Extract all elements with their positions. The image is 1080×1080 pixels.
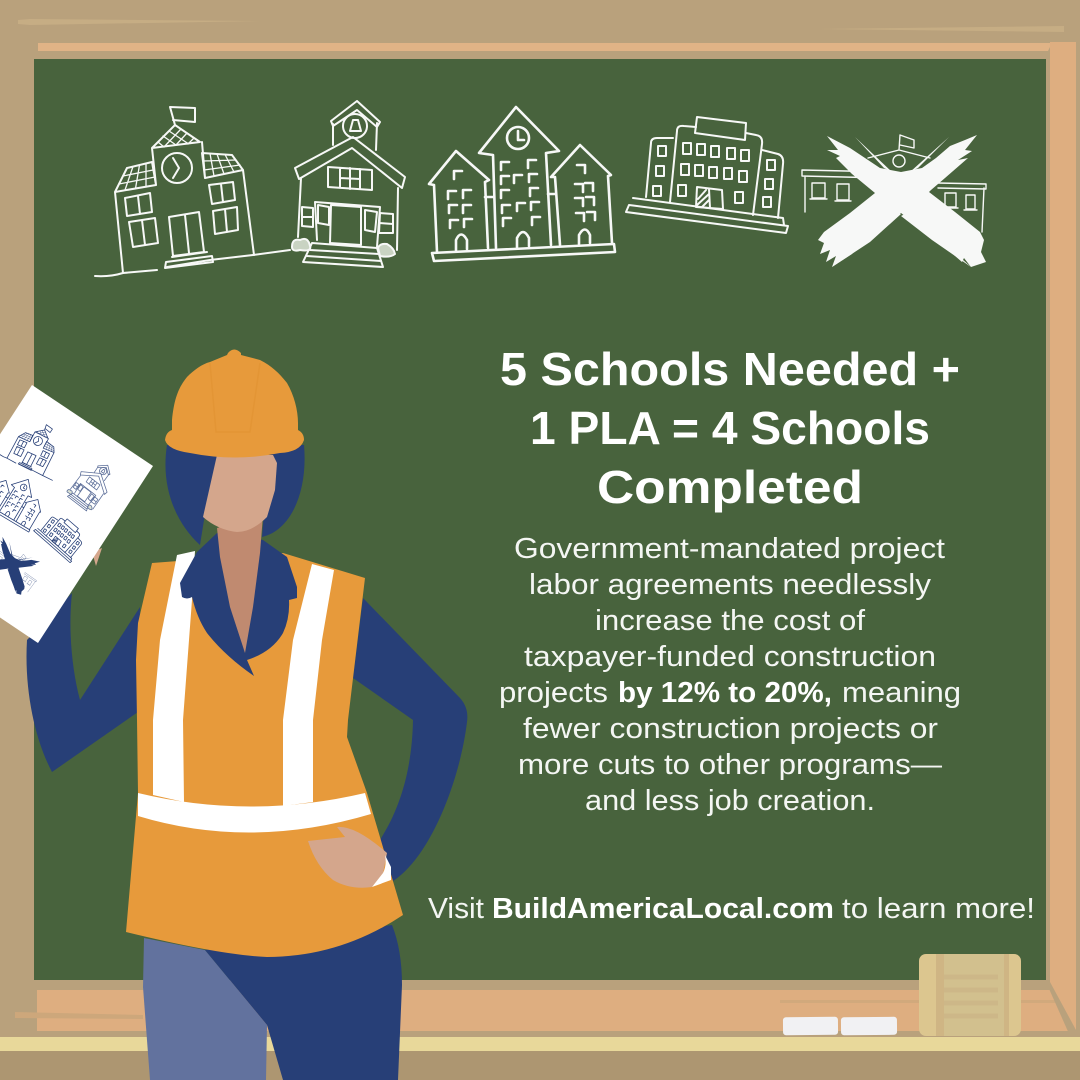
body text: projects: [499, 677, 608, 709]
icon: crossed-out school: [802, 135, 986, 267]
body text: labor agreements needlessly: [529, 569, 932, 601]
icon: modern school building: [626, 117, 788, 233]
call to action: Visit: [428, 893, 484, 925]
paper icon: school two: [64, 454, 120, 515]
hard hat: [165, 350, 304, 458]
paper icon: crossed-out school: [0, 538, 45, 593]
paper held up with small school drawings: [0, 385, 153, 643]
right arm on hip: [353, 598, 467, 883]
body text: increase the cost of: [595, 605, 865, 637]
neck: [217, 515, 263, 653]
call to action: [428, 893, 1035, 925]
hair: [165, 445, 305, 545]
icon: school with three towers: [429, 107, 615, 261]
body text: and less job creation.: [585, 785, 875, 817]
face: [203, 455, 277, 532]
paper icon: school three: [0, 465, 53, 534]
safety vest: [126, 553, 403, 957]
body text: meaning: [842, 677, 961, 709]
heading: [500, 343, 960, 513]
paper icon: school four: [30, 507, 90, 563]
vest reflective stripes: [138, 551, 371, 833]
body text: fewer construction projects or: [523, 713, 939, 745]
body text: Government-mandated project: [514, 533, 945, 565]
body text: by 12% to 20%,: [618, 677, 832, 709]
shirt cuff: [372, 855, 391, 887]
paper icon: navy cross: [0, 535, 42, 596]
raised left arm: [27, 593, 140, 772]
icon: school with flag and clock: [95, 107, 290, 276]
icon: chalk eraser: [919, 954, 1021, 1036]
pants: [143, 925, 402, 1080]
icon: chalk sticks: [783, 1017, 897, 1035]
body text: more cuts to other programs—: [518, 749, 943, 781]
collar: [180, 533, 297, 676]
illustrated construction worker: [0, 350, 467, 1080]
icon: schoolhouse with bell tower: [292, 101, 405, 267]
call to action: BuildAmericaLocal.com: [492, 893, 834, 925]
heading: 1 PLA = 4 Schools: [530, 402, 930, 454]
hand behind paper: [92, 548, 102, 566]
body text: [499, 533, 961, 817]
row of five chalk school drawings: [95, 101, 986, 276]
green chalkboard: [34, 59, 1046, 980]
body text: taxpayer-funded construction: [524, 641, 936, 673]
paper icon: school one: [0, 412, 76, 487]
call to action: to learn more!: [842, 893, 1035, 925]
hand in pocket: [308, 827, 387, 888]
heading: Completed: [597, 461, 863, 513]
heading: 5 Schools Needed +: [500, 343, 960, 395]
